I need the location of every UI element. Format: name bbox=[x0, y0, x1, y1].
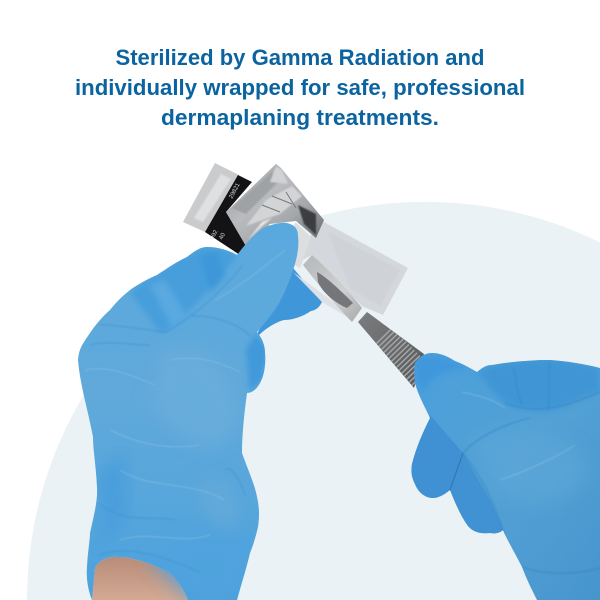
white paper back of packet bbox=[183, 163, 239, 232]
torn sterile packet bbox=[183, 163, 408, 320]
title: individually wrapped for safe, professional bbox=[75, 75, 525, 100]
white backing strip bbox=[290, 222, 311, 268]
black printed band: 992 bbox=[209, 229, 220, 241]
cuff opening and wrist bbox=[92, 557, 188, 600]
black printed band: 40 bbox=[218, 232, 227, 241]
black printed band bbox=[205, 175, 252, 255]
title: dermaplaning treatments. bbox=[161, 105, 439, 130]
glove shading and creases bbox=[85, 247, 285, 600]
left gloved hand bbox=[78, 223, 298, 600]
blade mount bbox=[303, 255, 362, 322]
grip shaft bbox=[358, 312, 424, 388]
pale blue circle backdrop bbox=[27, 202, 600, 600]
title bbox=[75, 45, 525, 130]
scalpel handle bbox=[303, 255, 424, 388]
left glove index finger behind blade bbox=[258, 268, 322, 336]
clear plastic wrapper bbox=[298, 221, 408, 315]
ribbed grip bbox=[382, 337, 422, 378]
black printed band: 29821 bbox=[228, 182, 242, 200]
torn foil wrapper bbox=[226, 164, 324, 248]
right glove shading and creases bbox=[405, 356, 600, 573]
title: Sterilized by Gamma Radiation and bbox=[116, 45, 484, 70]
right gloved hand bbox=[405, 353, 600, 600]
